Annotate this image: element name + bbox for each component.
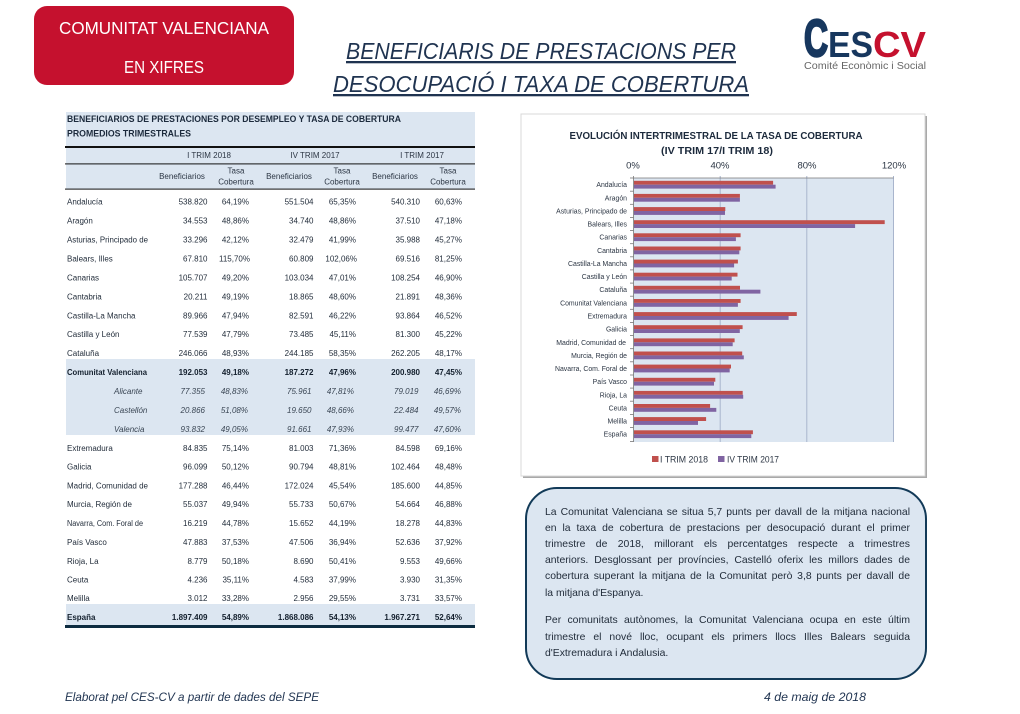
chart category labels: Castilla-La Mancha <box>568 261 627 268</box>
table column headers: Beneficiarios <box>159 172 205 181</box>
row: Valencia: Valencia <box>114 425 145 434</box>
row: Navarra: 44,78% <box>222 519 249 528</box>
row: Balears: 102,06% <box>325 254 357 264</box>
row: Canarias: 46,90% <box>435 274 462 282</box>
row: Cataluña: Cataluña <box>67 349 100 358</box>
row: Galicia: 50,12% <box>222 462 249 471</box>
table column headers: Cobertura <box>218 178 254 186</box>
row: Madrid: Madrid, Comunidad de <box>67 481 149 490</box>
row: Galicia: 102.464 <box>391 462 421 471</box>
chart category labels: Rioja, La <box>600 392 627 399</box>
callout: commentary: cobertura superant la mitjana de la Comunitat però 3,8 punts per davall de <box>545 570 910 582</box>
row: Comunitat Valenciana: 47,45% <box>435 368 462 377</box>
row: Andalucía: 64,19% <box>222 198 249 206</box>
row: Madrid: 185.600 <box>391 481 421 490</box>
row: Andalucía: 538.820 <box>179 198 208 206</box>
row: Alicante: Alicante <box>113 387 143 396</box>
row: Castilla y León: 47,79% <box>222 330 249 339</box>
row: Asturias: 32.479 <box>289 236 314 244</box>
row: Castellón: Castellón <box>114 406 148 415</box>
row: Cataluña: 262.205 <box>391 349 421 358</box>
row: Murcia: 50,67% <box>329 500 356 509</box>
chart category labels: Cataluña <box>599 287 627 294</box>
row: Balears: 115,70% <box>219 254 250 264</box>
bar chart <box>630 176 894 442</box>
table column headers: I TRIM 2018 <box>187 151 231 160</box>
row: Extremadura: 71,36% <box>329 444 356 453</box>
row: Rioja: 50,18% <box>222 557 249 566</box>
row: Cantabria: 21.891 <box>396 292 421 302</box>
row: Alicante: 77.355 <box>181 387 206 396</box>
chart category labels: Navarra, Com. Foral de <box>555 366 627 373</box>
row: Cataluña: 244.185 <box>285 349 314 358</box>
row: Madrid: 45,54% <box>329 481 356 490</box>
row: Canarias: Canarias <box>67 274 99 282</box>
row: Valencia: 47,93% <box>327 425 354 434</box>
logo: CESCV: ES <box>828 24 873 65</box>
row: Extremadura <box>67 444 462 453</box>
chart axis labels <box>626 160 907 172</box>
logo: CESCV <box>804 10 926 72</box>
footer date: 4 de maig de 2018 <box>764 690 866 704</box>
row: Alicante: 46,69% <box>434 387 461 396</box>
chart category labels: Andalucía <box>596 182 627 189</box>
row: Balears: 81,25% <box>435 254 462 264</box>
row: Cantabria: 20.211 <box>184 292 208 302</box>
row: Cataluña: 48,93% <box>222 349 249 358</box>
table heading <box>67 114 401 138</box>
row: Castilla y León <box>67 330 462 339</box>
row: Ceuta: Ceuta <box>67 575 89 584</box>
row: Alicante: 75.961 <box>287 387 312 396</box>
table: beneficiarios y tasa de cobertura <box>65 112 475 628</box>
row: Asturias: 41,99% <box>329 236 356 244</box>
row: Comunitat Valenciana: 47,96% <box>329 368 356 377</box>
row: Rioja: Rioja, La <box>67 557 99 566</box>
row: Galicia: 48,48% <box>435 462 462 471</box>
table heading: BENEFICIARIOS DE PRESTACIONES POR DESEMPLEO Y TASA DE COBERTURA <box>67 114 401 124</box>
chart category labels: País Vasco <box>593 379 627 386</box>
row: Aragón: 48,86% <box>329 216 356 226</box>
row: Ceuta: 31,35% <box>435 575 462 584</box>
table column headers: Beneficiarios <box>266 172 312 181</box>
row: Castilla-La Mancha: 93.864 <box>396 312 421 320</box>
table column headers: Cobertura <box>324 178 360 186</box>
row: Galicia: 48,81% <box>329 462 356 471</box>
row: Cantabria <box>67 292 462 302</box>
row: Extremadura: 81.003 <box>289 444 314 453</box>
row: España: 54,89% <box>222 613 249 622</box>
chart category labels: Murcia, Región de <box>571 353 627 360</box>
row: Madrid: 172.024 <box>285 481 314 490</box>
row: Andalucía: Andalucía <box>67 198 103 206</box>
row: Castellón: 19.650 <box>287 406 312 415</box>
row: Castilla y León: 73.485 <box>289 330 314 339</box>
row: Rioja: 8.779 <box>187 557 208 566</box>
row: Navarra: 44,83% <box>435 519 462 528</box>
callout: commentary: anteriors. Desglossant per províncies, Castelló oferix les millors dades de <box>545 554 910 566</box>
row: País Vasco: 37,92% <box>435 538 462 547</box>
row: Galicia: 90.794 <box>289 462 314 471</box>
row: Ceuta: 4.236 <box>187 575 208 584</box>
chart title: EVOLUCIÓN INTERTRIMESTRAL DE LA TASA DE COBERTURA <box>570 129 863 142</box>
row: Asturias: Asturias, Principado de <box>67 236 149 244</box>
chart category labels <box>555 182 628 439</box>
row: Galicia <box>67 462 462 471</box>
chart category labels: Balears, Illes <box>588 222 628 229</box>
callout: commentary: trimestre de 2018, millorant els percentatges respecte a trimestres <box>545 538 910 550</box>
row: País Vasco: 37,53% <box>222 538 249 547</box>
row: Andalucía: 65,35% <box>329 198 356 206</box>
row: Murcia: 49,94% <box>222 500 249 509</box>
chart category labels: Ceuta <box>609 405 627 412</box>
chart axis labels: 80% <box>797 160 817 172</box>
chart category labels: Castilla y León <box>582 274 627 281</box>
row: País Vasco: 52.636 <box>396 538 421 547</box>
row: Melilla: 33,28% <box>222 594 249 603</box>
callout: commentary: la mitjana d'Espanya. <box>545 588 643 598</box>
logo: CESCV: Comité Econòmic i Social <box>804 60 926 72</box>
table column headers: Cobertura <box>430 178 466 186</box>
table heading: PROMEDIOS TRIMESTRALES <box>67 128 191 138</box>
row: Castilla y León: Castilla y León <box>67 330 119 339</box>
row: Cantabria: 48,60% <box>329 292 356 302</box>
row: Madrid: 177.288 <box>179 481 208 490</box>
row: Asturias: 35.988 <box>396 236 421 244</box>
row: Castellón: 49,57% <box>434 406 461 415</box>
chart category labels: Asturias, Principado de <box>556 208 627 216</box>
logo: CESCV: CV <box>873 24 926 65</box>
row: País Vasco: 36,94% <box>329 538 356 547</box>
row: Navarra: 18.278 <box>396 519 421 528</box>
chart axis labels: 120% <box>882 160 907 172</box>
row: Balears <box>67 254 462 264</box>
chart title: (IV TRIM 17/I TRIM 18) <box>661 145 773 157</box>
row: Navarra <box>67 519 462 528</box>
row: Ceuta: 35,11% <box>222 575 249 584</box>
row: España: 54,13% <box>329 613 356 622</box>
row: Comunitat Valenciana: Comunitat Valenciana <box>67 368 148 377</box>
row: España: 1.967.271 <box>384 613 421 622</box>
row: Extremadura: 75,14% <box>222 444 249 453</box>
row: Castellón <box>114 406 461 415</box>
row: Valencia: 47,60% <box>434 425 461 434</box>
table column headers: Tasa <box>228 166 245 176</box>
row: Alicante: 47,81% <box>327 387 354 396</box>
row: Comunitat Valenciana: 49,18% <box>222 368 249 377</box>
row: Asturias: 42,12% <box>222 236 249 244</box>
row: Castilla-La Mancha: 82.591 <box>289 312 314 320</box>
row: Asturias: 33.296 <box>183 236 208 244</box>
row: Balears: Balears, Illes <box>67 254 113 264</box>
chart axis labels: 0% <box>626 160 640 172</box>
row: Balears: 60.809 <box>289 254 314 264</box>
chart category labels: Comunitat Valenciana <box>560 300 627 307</box>
row: Navarra: Navarra, Com. Foral de <box>67 519 143 528</box>
row: Balears: 67.810 <box>183 254 208 264</box>
row: Castilla y León: 45,11% <box>329 330 356 339</box>
row: Murcia: 55.733 <box>289 500 314 509</box>
row: Navarra: 44,19% <box>329 519 356 528</box>
row: Alicante: 48,83% <box>221 387 248 396</box>
row: Andalucía: 551.504 <box>285 198 314 206</box>
row: Melilla: Melilla <box>67 594 90 603</box>
row: Murcia: 46,88% <box>435 500 462 509</box>
callout: commentary: en la taxa de cobertura de prestacions per desocupació durant el primer <box>545 522 910 534</box>
row: Cataluña: 58,35% <box>329 349 356 358</box>
row: Aragón: 34.553 <box>183 216 208 226</box>
row: Canarias <box>67 274 462 282</box>
chart category labels: Canarias <box>599 235 628 242</box>
row: Andalucía: 60,63% <box>435 198 462 206</box>
row: Comunitat Valenciana: 192.053 <box>179 368 208 377</box>
chart category labels: Galicia <box>606 327 627 334</box>
row: Castilla-La Mancha: 46,22% <box>329 312 356 320</box>
row: Ceuta: 37,99% <box>329 575 356 584</box>
row: Cataluña: 48,17% <box>435 349 462 358</box>
row: Madrid: 46,44% <box>222 481 249 490</box>
title <box>333 38 749 97</box>
chart axis labels: 40% <box>710 160 730 172</box>
row: Castilla-La Mancha: 46,52% <box>435 312 462 320</box>
row: Galicia: Galicia <box>67 462 92 471</box>
row: Canarias: 108.254 <box>391 274 421 282</box>
row: Canarias: 103.034 <box>285 274 314 282</box>
table column headers: Tasa <box>334 166 351 176</box>
table column headers: I TRIM 2017 <box>400 151 444 160</box>
title: BENEFICIARIS DE PRESTACIONS PER <box>346 38 736 64</box>
row: Rioja: 49,66% <box>435 557 462 566</box>
badge: Comunitat Valenciana en xifres: EN XIFRES <box>124 57 204 77</box>
chart title <box>570 129 863 157</box>
row: Andalucía: 540.310 <box>391 198 421 206</box>
row: Castilla-La Mancha: 47,94% <box>222 312 249 320</box>
row: Aragón: Aragón <box>67 216 93 226</box>
row: Alicante: 79.019 <box>394 387 419 396</box>
row: Castellón: 22.484 <box>393 406 419 415</box>
row: Andalucía <box>67 198 462 206</box>
row: Ceuta <box>67 575 462 584</box>
row: Comunitat Valenciana: 187.272 <box>285 368 314 377</box>
row: Murcia: 55.037 <box>183 500 208 509</box>
row: Castilla y León: 77.539 <box>183 330 208 339</box>
row: Asturias: 45,27% <box>435 236 462 244</box>
callout: commentary: trimestre el nové lloc, ocupant els primers llocs Illes Balears seguida <box>545 632 910 642</box>
row: Aragón: 37.510 <box>396 216 421 226</box>
chart legend: IV TRIM 2017 <box>727 454 779 466</box>
row: Valencia: 99.477 <box>394 425 419 434</box>
row: Extremadura: 84.598 <box>396 444 421 453</box>
row: Canarias: 47,01% <box>329 274 356 282</box>
row: Castilla y León: 45,22% <box>435 330 462 339</box>
row: Comunitat Valenciana: 200.980 <box>391 368 421 377</box>
callout: commentary: Per comunitats autònomes, la Comunitat Valenciana ocupa en este últim <box>545 614 910 626</box>
row: Melilla: 29,55% <box>329 594 356 603</box>
row: País Vasco: 47.883 <box>183 538 208 547</box>
row: España: España <box>67 613 96 622</box>
row: Ceuta: 3.930 <box>400 575 421 584</box>
chart category labels: España <box>604 432 627 439</box>
row: Aragón: 47,18% <box>435 216 462 226</box>
row: Comunitat Valenciana <box>67 368 462 377</box>
row: Canarias: 49,20% <box>222 274 249 282</box>
chart category labels: Cantabria <box>597 248 627 255</box>
row: Canarias: 105.707 <box>179 274 208 282</box>
row: Navarra: 15.652 <box>289 519 314 528</box>
row: Melilla: 3.012 <box>187 594 208 603</box>
row: País Vasco <box>67 538 462 547</box>
row: Asturias <box>67 236 462 244</box>
row: Castilla y León: 81.300 <box>396 330 421 339</box>
row: Valencia: 91.661 <box>287 425 312 434</box>
row: España: 1.868.086 <box>278 613 314 622</box>
row: Melilla: 2.956 <box>293 594 314 603</box>
chart category labels: Madrid, Comunidad de <box>556 340 626 347</box>
row: Melilla <box>67 594 462 603</box>
row: Cantabria: 48,36% <box>435 292 462 302</box>
row: Castilla-La Mancha: 89.966 <box>183 312 208 320</box>
chart legend <box>652 454 779 466</box>
chart legend: I TRIM 2018 <box>660 454 708 466</box>
row: Balears: 69.516 <box>396 254 421 264</box>
row: Castellón: 48,66% <box>327 406 354 415</box>
row: Cantabria: 49,19% <box>222 292 249 302</box>
row: Castilla-La Mancha <box>67 312 462 320</box>
badge: Comunitat Valenciana en xifres <box>34 6 294 85</box>
table column headers: Beneficiarios <box>372 172 418 181</box>
row: España: 52,64% <box>435 613 462 622</box>
badge: Comunitat Valenciana en xifres: COMUNITAT VALENCIANA <box>59 18 269 38</box>
row: Castilla-La Mancha: Castilla-La Mancha <box>67 312 136 320</box>
row: Navarra: 16.219 <box>183 519 208 528</box>
row: Cantabria: 18.865 <box>289 292 314 302</box>
table column headers: Tasa <box>440 166 457 176</box>
row: Murcia <box>67 500 462 509</box>
row: Valencia: 93.832 <box>181 425 206 434</box>
table column headers: IV TRIM 2017 <box>290 151 340 160</box>
row: Rioja: 50,41% <box>329 557 356 566</box>
row: Extremadura: 69,16% <box>435 444 462 453</box>
row: Rioja: 9.553 <box>400 557 421 566</box>
row: País Vasco: País Vasco <box>67 538 107 547</box>
callout: commentary: La Comunitat Valenciana se situa 5,7 punts per davall de la mitjana nacional <box>545 506 910 518</box>
row: Madrid <box>67 481 462 490</box>
callout: commentary: d'Extremadura i Andalusia. <box>545 648 668 658</box>
row: España: 1.897.409 <box>172 613 208 622</box>
row: Aragón: 34.740 <box>289 216 314 226</box>
row: Aragón: 48,86% <box>222 216 249 226</box>
row: Extremadura: Extremadura <box>67 444 113 453</box>
row: Valencia <box>114 425 461 434</box>
row: Melilla: 3.731 <box>400 594 421 603</box>
row: Cataluña: 246.066 <box>179 349 208 358</box>
row: Murcia: Murcia, Región de <box>67 500 132 509</box>
row: Valencia: 49,05% <box>221 425 248 434</box>
row: Galicia: 96.099 <box>183 462 208 471</box>
chart category labels: Extremadura <box>588 314 627 320</box>
row: Aragón <box>67 216 462 226</box>
row: Alicante <box>113 387 461 396</box>
row: Cataluña <box>67 349 462 358</box>
row: Ceuta: 4.583 <box>293 575 314 584</box>
row: Melilla: 33,57% <box>435 594 462 603</box>
logo: CESCV: C <box>804 10 828 68</box>
row: Cantabria: Cantabria <box>67 292 102 302</box>
row: Castellón: 51,08% <box>221 406 248 415</box>
row: Rioja <box>67 557 462 566</box>
row: Murcia: 54.664 <box>396 500 421 509</box>
row: Extremadura: 84.835 <box>183 444 208 453</box>
row: España <box>67 613 462 622</box>
row: Castellón: 20.866 <box>180 406 206 415</box>
chart category labels: Melilla <box>607 418 627 426</box>
callout: commentary <box>525 487 927 680</box>
panel: chart <box>521 114 927 478</box>
table column headers <box>159 151 466 186</box>
chart category labels: Aragón <box>605 195 627 202</box>
row: Rioja: 8.690 <box>293 557 314 566</box>
footer source: Elaborat pel CES-CV a partir de dades del SEPE <box>65 690 320 704</box>
title: DESOCUPACIÓ I TAXA DE COBERTURA <box>333 71 749 97</box>
row: País Vasco: 47.506 <box>289 538 314 547</box>
row: Madrid: 44,85% <box>435 481 462 490</box>
